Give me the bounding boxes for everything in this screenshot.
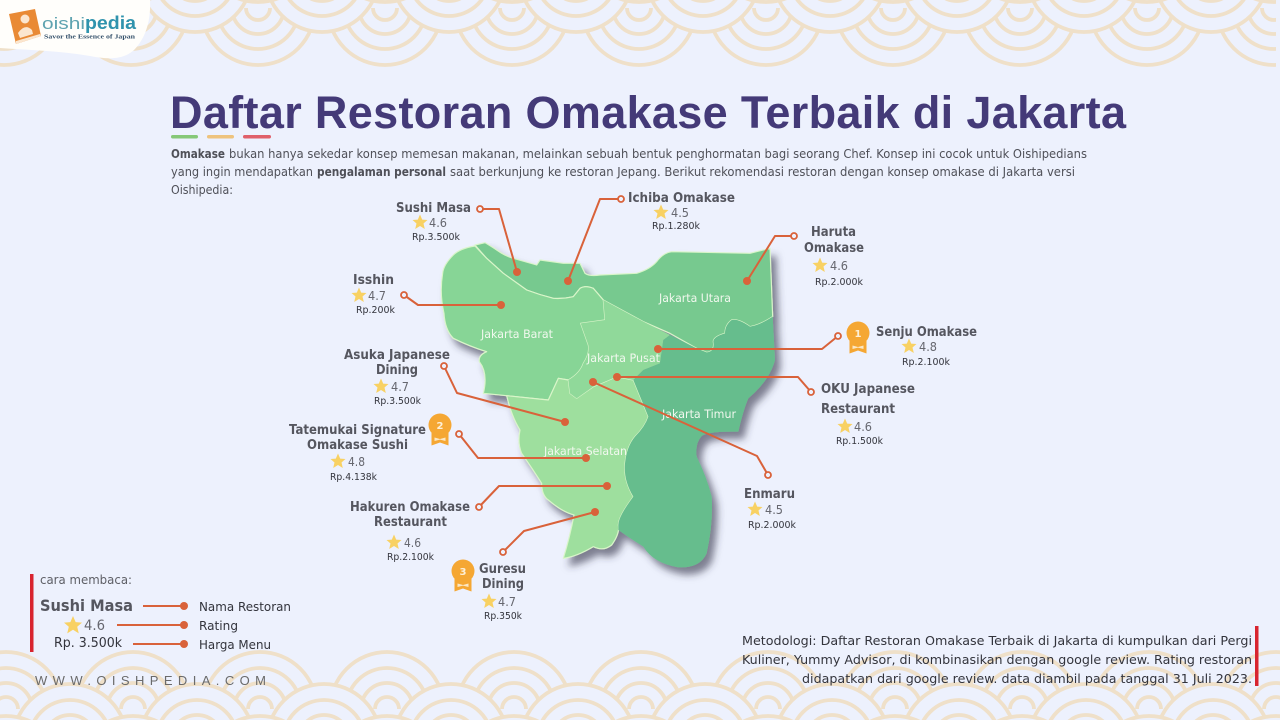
icon: orange book with chef xyxy=(9,9,41,44)
restaurant: Guresu Dining: 4.7 xyxy=(498,595,516,609)
top wave pattern xyxy=(0,0,1276,67)
legend: how to read: Nama Restoran xyxy=(199,599,291,614)
intro paragraph: Oishipedia: xyxy=(171,183,233,197)
restaurant: Guresu Dining: Rp.350k xyxy=(484,611,522,622)
restaurant: Hakuren Omakase Restaurant: 4.6 xyxy=(404,536,421,550)
map region labels: Jakarta Selatan xyxy=(543,444,627,458)
intro paragraph: bukan hanya sekedar konsep memesan makanan, melainkan sebuah bentuk penghormatan bagi seorang Chef. Konsep ini cocok untuk Oishipedians xyxy=(229,147,1087,161)
restaurant: Haruta Omakase: 4.6 xyxy=(830,259,848,273)
legend: how to read xyxy=(30,572,291,652)
restaurant: Senju Omakase: Rp.2.100k xyxy=(902,357,950,368)
restaurant: Haruta Omakase: Haruta xyxy=(811,225,856,240)
restaurant: Enmaru xyxy=(589,378,796,531)
restaurant: Tatemukai Signature Omakase Sushi: Tatemukai Signature xyxy=(289,423,426,438)
region: Jakarta Selatan xyxy=(507,377,648,558)
restaurant: Asuka Japanese Dining: 4.7 xyxy=(391,380,409,394)
restaurant: OKU Japanese Restaurant: Restaurant xyxy=(821,402,895,417)
restaurant: Guresu Dining: Guresu xyxy=(479,562,526,577)
region: Jakarta Timur xyxy=(618,317,775,567)
legend: how to read: 4.6 xyxy=(84,618,105,634)
restaurant: Haruta Omakase: Omakase xyxy=(804,241,864,256)
restaurant: Ichiba Omakase: Ichiba Omakase xyxy=(628,191,735,206)
restaurant: Guresu Dining: 3 xyxy=(460,567,467,578)
restaurant: Isshin: Isshin xyxy=(353,273,394,288)
restaurant: Senju Omakase: Senju Omakase xyxy=(876,325,977,340)
map region labels: Jakarta Pusat xyxy=(586,351,660,365)
region: Jakarta Pusat xyxy=(568,300,670,398)
restaurant: Guresu Dining: Dining xyxy=(482,577,524,592)
methodology note: Metodologi: Daftar Restoran Omakase Terbaik di Jakarta di kumpulkan dari Pergi xyxy=(742,633,1252,648)
restaurant: Haruta Omakase: Rp.2.000k xyxy=(815,277,863,288)
restaurant: Enmaru: 4.5 xyxy=(765,503,783,517)
restaurant: Ichiba Omakase xyxy=(564,191,735,285)
legend: how to read: cara membaca: xyxy=(40,572,132,587)
restaurant: OKU Japanese Restaurant xyxy=(613,373,915,447)
intro paragraph: Omakase xyxy=(171,147,225,161)
legend: how to read: Rating xyxy=(199,618,238,633)
logo: oishipedia: pedia xyxy=(85,13,137,33)
intro paragraph xyxy=(171,147,1087,197)
logo: oishipedia xyxy=(0,0,150,58)
methodology note xyxy=(742,626,1258,686)
map region labels: Jakarta Barat xyxy=(480,327,553,341)
logo tagline: Savor the Essence of Japan xyxy=(44,34,136,40)
title accent bars xyxy=(171,135,271,138)
title: Daftar Restoran Omakase Terbaik di Jakarta xyxy=(170,87,1127,138)
legend: how to read: Sushi Masa xyxy=(40,596,133,615)
restaurant: OKU Japanese Restaurant: 4.6 xyxy=(854,420,872,434)
restaurant: Sushi Masa: Sushi Masa xyxy=(396,201,471,216)
restaurant: Sushi Masa xyxy=(396,201,521,276)
bottom wave pattern xyxy=(0,650,1280,720)
map region labels: Jakarta Timur xyxy=(661,407,736,421)
restaurant: Hakuren Omakase Restaurant xyxy=(350,482,611,563)
restaurant: Enmaru: Rp.2.000k xyxy=(748,520,796,531)
restaurant: Senju Omakase: 4.8 xyxy=(919,340,937,354)
region: Jakarta Utara xyxy=(475,243,773,352)
restaurant: Isshin xyxy=(352,273,505,316)
legend: how to read: Harga Menu xyxy=(199,637,271,652)
restaurant: Asuka Japanese Dining: Dining xyxy=(376,363,418,378)
restaurant: Asuka Japanese Dining: Asuka Japanese xyxy=(344,348,450,363)
map region labels: Jakarta Utara xyxy=(658,291,731,305)
methodology note: Kuliner, Yummy Advisor, di kombinasikan dengan google review. Rating restoran xyxy=(742,652,1252,667)
region: Jakarta Barat xyxy=(441,246,605,400)
map region labels xyxy=(480,291,736,458)
restaurant: Tatemukai Signature Omakase Sushi: 2 xyxy=(437,421,444,432)
restaurant: OKU Japanese Restaurant: Rp.1.500k xyxy=(836,436,883,447)
intro paragraph: yang ingin mendapatkan xyxy=(171,165,313,179)
restaurant: Senju Omakase xyxy=(654,322,977,368)
logo wordmark: oishi xyxy=(42,14,85,33)
restaurant: Isshin: Rp.200k xyxy=(356,305,395,316)
methodology note: didapatkan dari google review. data diambil pada tanggal 31 Juli 2023. xyxy=(802,671,1252,686)
restaurant: Tatemukai Signature Omakase Sushi: Rp.4.138k xyxy=(330,472,377,483)
map of Jakarta xyxy=(441,243,775,567)
restaurant: Asuka Japanese Dining xyxy=(344,348,569,426)
restaurant: Ichiba Omakase: Rp.1.280k xyxy=(652,221,700,232)
restaurant: Ichiba Omakase: 4.5 xyxy=(671,206,689,220)
legend: how to read: Rp. 3.500k xyxy=(54,636,122,651)
restaurant: Enmaru: Enmaru xyxy=(744,487,795,502)
restaurant: Guresu Dining xyxy=(452,508,599,622)
restaurant: Sushi Masa: Rp.3.500k xyxy=(412,232,460,243)
intro paragraph: saat berkunjung ke restoran Jepang. Berikut rekomendasi restoran dengan konsep omakase di Jakarta versi xyxy=(450,165,1075,179)
website address: WWW.OISHPEDIA.COM xyxy=(35,673,266,688)
restaurant: Tatemukai Signature Omakase Sushi: Omakase Sushi xyxy=(307,438,408,453)
restaurant: Tatemukai Signature Omakase Sushi xyxy=(289,414,590,483)
restaurant: OKU Japanese Restaurant: OKU Japanese xyxy=(821,382,915,397)
restaurant: Senju Omakase: 1 xyxy=(855,329,862,340)
restaurant: Hakuren Omakase Restaurant: Restaurant xyxy=(374,515,447,530)
restaurant: Hakuren Omakase Restaurant: Hakuren Omakase xyxy=(350,500,470,515)
restaurant: Haruta Omakase xyxy=(743,225,864,288)
restaurant: Hakuren Omakase Restaurant: Rp.2.100k xyxy=(387,552,434,563)
restaurant: Asuka Japanese Dining: Rp.3.500k xyxy=(374,396,421,407)
intro paragraph: pengalaman personal xyxy=(317,165,446,179)
restaurant: Isshin: 4.7 xyxy=(368,289,386,303)
restaurant: Sushi Masa: 4.6 xyxy=(429,216,447,230)
restaurant: Tatemukai Signature Omakase Sushi: 4.8 xyxy=(348,455,365,469)
